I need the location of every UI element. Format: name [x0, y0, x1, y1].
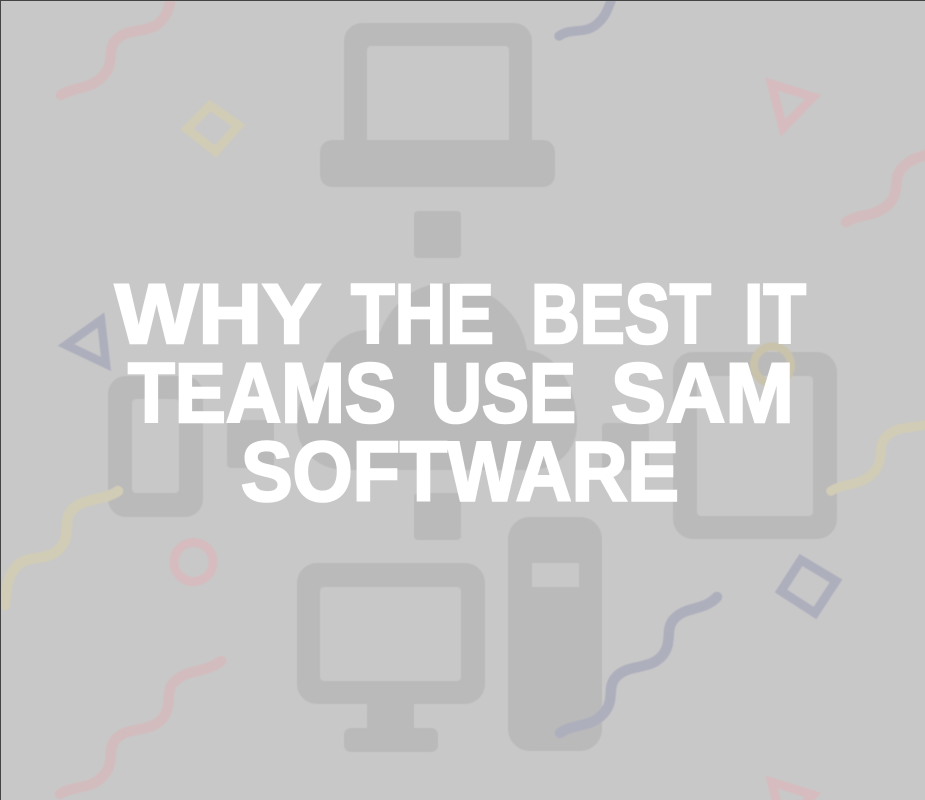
icon: connector right	[602, 423, 649, 470]
icon: tablet	[673, 352, 837, 539]
shape: blue triangle left	[66, 320, 106, 364]
squiggle: pink bottom left	[60, 661, 221, 794]
icon: connector top	[414, 211, 461, 258]
title: SAM	[611, 346, 794, 440]
shape: yellow circle	[754, 346, 791, 384]
squiggle: yellow left	[5, 491, 118, 605]
shape: pink triangle bottom	[772, 782, 813, 800]
icon: cloud hub	[297, 283, 577, 470]
icon: connector bottom	[414, 493, 461, 540]
title: BEST	[531, 267, 711, 361]
shape: blue diamond	[781, 560, 836, 613]
title: IT	[744, 267, 806, 361]
title	[115, 267, 806, 518]
squiggle: blue bottom right	[560, 597, 717, 733]
shape: yellow diamond	[187, 106, 238, 152]
icon: laptop	[320, 23, 555, 187]
squiggle: pink right	[846, 155, 925, 222]
icon: computer tower	[508, 517, 602, 751]
icon: desktop monitor	[297, 563, 485, 752]
squiggle: pink top left	[61, 3, 170, 95]
title: USE	[431, 346, 576, 440]
title: TEAMS	[128, 346, 396, 440]
title: THE	[351, 267, 494, 361]
icon: connector left	[227, 420, 274, 468]
title: WHY	[115, 267, 321, 361]
title: SOFTWARE	[241, 424, 679, 518]
icon: phone	[108, 376, 203, 517]
shape: pink triangle top	[772, 84, 813, 128]
squiggle: blue top	[559, 1, 611, 36]
shape: pink circle	[174, 542, 213, 582]
squiggle: yellow right	[831, 425, 925, 491]
